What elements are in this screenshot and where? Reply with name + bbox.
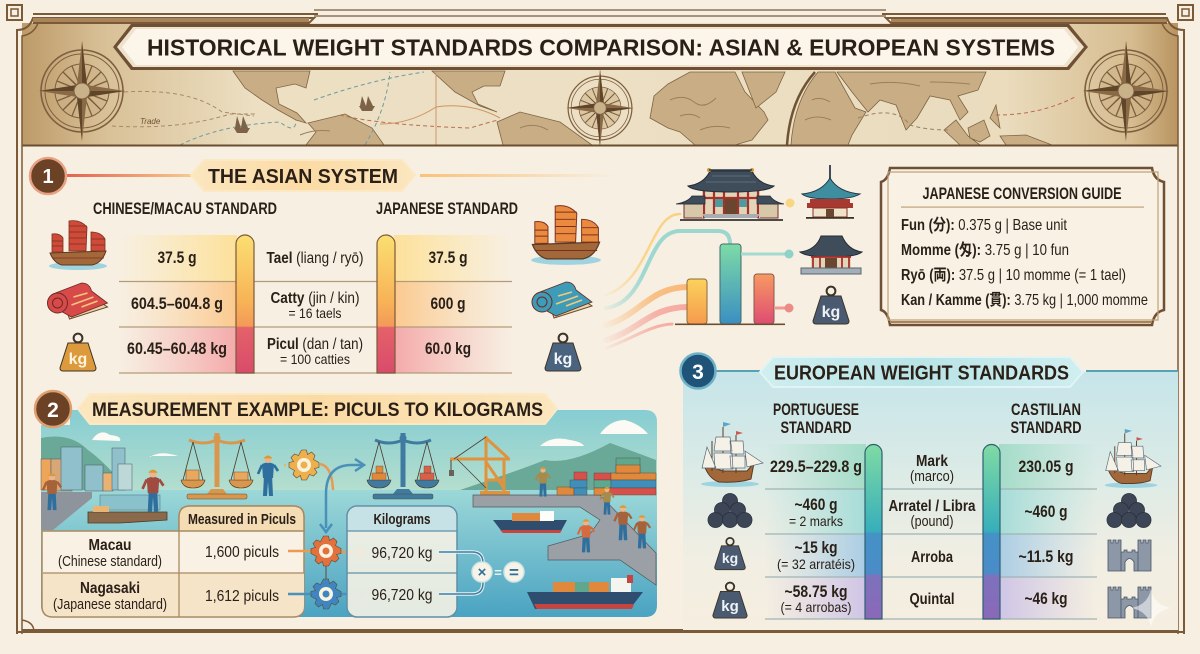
Castilian values: ~460 g xyxy=(1024,502,1068,521)
section 2 badge: 2 xyxy=(47,399,59,422)
icon: red cloth roll xyxy=(48,283,108,319)
Portuguese values: (= 32 arratéis) xyxy=(777,556,855,572)
hills xyxy=(41,436,656,490)
icon: orange junk xyxy=(531,206,601,265)
connectors xyxy=(741,198,794,312)
japanese values: 37.5 g xyxy=(428,248,468,267)
panel: section 2 measurement example xyxy=(35,391,657,617)
icon: slate kg weight xyxy=(545,334,581,371)
icon: gold kg weight: kg xyxy=(69,351,87,368)
unit labels: Catty (jin / kin) xyxy=(270,290,360,307)
crane xyxy=(449,436,510,493)
section 3 heading: EUROPEAN WEIGHT STANDARDS xyxy=(774,362,1069,384)
map land shapes xyxy=(233,71,1052,145)
column headings: CASTILIAN xyxy=(1011,401,1081,419)
gear orange xyxy=(311,536,341,566)
section 3 badge: 3 xyxy=(692,361,704,384)
icon: gold kg weight xyxy=(60,334,96,371)
land relief marks xyxy=(300,82,970,135)
icon: kg weight xyxy=(813,287,849,324)
balance scale blue xyxy=(367,433,439,499)
guide entries: Momme (匁): 3.75 g | 10 fun xyxy=(901,241,1069,259)
quay xyxy=(473,495,656,585)
japanese values: 60.0 kg xyxy=(425,339,471,358)
workers left xyxy=(43,473,61,510)
icon: Castilian galleon xyxy=(1105,429,1161,488)
unit labels: Quintal xyxy=(910,591,954,608)
chinese values xyxy=(127,248,227,358)
guide entries: Kan / Kamme (貫): 3.75 kg | 1,000 momme xyxy=(901,291,1148,309)
kilograms table: 96,720 kg xyxy=(372,587,432,604)
bars xyxy=(687,279,707,324)
map ship xyxy=(234,116,250,133)
Castilian values xyxy=(1018,457,1074,608)
icon: kg weight two: kg xyxy=(721,598,739,615)
Castilian values: ~11.5 kg xyxy=(1018,547,1074,566)
panel: section 3 European standards xyxy=(680,354,1178,630)
gauge Castilian xyxy=(983,444,1000,619)
workers right xyxy=(536,467,650,552)
ship large xyxy=(527,575,643,609)
chinese values: 60.45–60.48 kg xyxy=(127,339,227,358)
equals comparison: = xyxy=(509,563,519,582)
section 3 badge xyxy=(680,354,716,388)
unit labels: (pound) xyxy=(910,514,954,530)
chinese values: 604.5–604.8 g xyxy=(131,294,223,313)
unit labels xyxy=(888,453,976,608)
piculs table xyxy=(42,506,304,617)
baseline xyxy=(675,324,785,325)
Portuguese values xyxy=(770,457,862,615)
compass left xyxy=(39,41,125,141)
process arrows xyxy=(284,459,364,532)
blue scale loads xyxy=(372,466,386,480)
icon: kg weight one xyxy=(715,538,745,570)
section 1 badge xyxy=(30,158,66,194)
Castilian values: 230.05 g xyxy=(1018,457,1074,476)
column headings: JAPANESE STANDARD xyxy=(376,200,518,218)
unit labels: Picul (dan / tan) xyxy=(267,336,363,353)
unit labels: = 100 catties xyxy=(280,351,350,367)
European table xyxy=(765,444,1097,619)
column headings: PORTUGUESE xyxy=(773,401,859,419)
piculs table: Measured in Piculs xyxy=(188,512,296,528)
chart: flow and bars xyxy=(606,198,794,348)
kilograms table: 96,720 kg xyxy=(372,545,432,562)
unit labels: (marco) xyxy=(910,469,954,485)
flow ribbons xyxy=(606,214,730,348)
panel: section 1 the Asian system xyxy=(30,158,615,373)
equals comparison: × xyxy=(478,564,487,581)
title: HISTORICAL WEIGHT STANDARDS COMPARISON: ASIAN & EUROPEAN SYSTEMS xyxy=(147,34,1055,60)
unit labels: = 16 taels xyxy=(288,305,342,321)
map ship two xyxy=(359,96,375,111)
section 1 badge: 1 xyxy=(42,166,54,188)
containers xyxy=(557,458,656,495)
panel: Japanese conversion guide xyxy=(881,168,1164,325)
japanese values xyxy=(425,248,471,358)
column headings: STANDARD xyxy=(780,419,852,437)
icon: red junk xyxy=(49,221,107,270)
section 2 heading: MEASUREMENT EXAMPLE: PICULS TO KILOGRAMS xyxy=(92,399,543,421)
section 1 heading xyxy=(191,160,415,191)
column headings xyxy=(93,200,518,218)
quay left xyxy=(41,492,92,530)
gauge right xyxy=(377,235,395,373)
icon: castle one xyxy=(1108,540,1151,571)
Castilian values: ~46 kg xyxy=(1024,589,1068,608)
equals comparison: = xyxy=(494,565,502,580)
piculs table: Macau xyxy=(88,537,132,554)
watermark sparkle xyxy=(1131,589,1171,627)
dock barge xyxy=(88,512,167,523)
Portuguese values: 229.5–229.8 g xyxy=(770,457,862,476)
unit labels: Arroba xyxy=(911,549,953,566)
gauge left xyxy=(236,235,254,373)
icon: blue cloth roll xyxy=(532,282,592,318)
icon: kg weight: kg xyxy=(822,304,840,321)
compass centre xyxy=(567,69,633,147)
blue scale loads right xyxy=(420,466,434,480)
comparison table xyxy=(119,235,512,373)
harbor scene xyxy=(41,410,657,617)
city xyxy=(41,447,132,491)
section 1 heading: THE ASIAN SYSTEM xyxy=(208,166,398,188)
piculs table: 1,600 piculs xyxy=(205,544,279,561)
unit labels xyxy=(266,250,364,367)
icon: cannonballs left xyxy=(708,493,752,528)
trade routes xyxy=(112,72,1075,145)
tan scale loads xyxy=(186,470,248,480)
map banner xyxy=(22,10,1178,145)
conversion connectors xyxy=(288,546,364,600)
map text: Trade xyxy=(140,117,161,126)
bar two xyxy=(720,244,741,324)
piculs table: Nagasaki xyxy=(80,580,140,597)
icon: kg weight two xyxy=(713,583,747,618)
section 3 rule xyxy=(715,370,1178,372)
worker dock xyxy=(143,470,163,512)
guide entries: Fun (分): 0.375 g | Base unit xyxy=(901,216,1067,234)
piculs table: (Japanese standard) xyxy=(53,597,167,613)
icon: castle two xyxy=(1108,587,1151,618)
balance scale tan xyxy=(181,433,253,499)
column headings: CHINESE/MACAU STANDARD xyxy=(93,200,277,218)
Portuguese values: = 2 marks xyxy=(789,513,843,529)
Portuguese values: ~460 g xyxy=(794,495,838,514)
column headings xyxy=(773,401,1082,437)
icon: small temple xyxy=(800,236,862,274)
chinese values: 37.5 g xyxy=(158,248,196,267)
title banner xyxy=(113,24,1088,70)
column headings: STANDARD xyxy=(1010,419,1082,437)
compass right xyxy=(1083,41,1169,141)
Portuguese values: (= 4 arrobas) xyxy=(780,599,852,615)
equals comparison xyxy=(439,552,524,594)
icon: main temple xyxy=(676,168,784,221)
guide entries xyxy=(901,216,1148,309)
Portuguese values: ~58.75 kg xyxy=(784,582,848,601)
icon: slate kg weight: kg xyxy=(554,351,572,368)
section 1 rule xyxy=(63,174,615,177)
bar three xyxy=(754,274,774,324)
section 2 badge xyxy=(35,391,71,427)
gear yellow xyxy=(289,450,319,480)
map divider line xyxy=(22,144,1178,146)
piculs table: (Chinese standard) xyxy=(58,554,162,570)
section 3 heading xyxy=(760,357,1083,387)
ship small xyxy=(493,511,567,533)
icon: pagoda xyxy=(802,165,860,219)
Portuguese values: ~15 kg xyxy=(794,538,838,557)
guide entries: Ryō (両): 37.5 g | 10 momme (= 1 tael) xyxy=(901,267,1126,284)
clouds xyxy=(92,420,648,457)
icon: kg weight one: kg xyxy=(722,550,738,566)
unit labels: Arratel / Libra xyxy=(888,498,976,515)
unit labels: Tael (liang / ryō) xyxy=(266,250,364,267)
gear blue xyxy=(311,579,341,609)
japanese values: 600 g xyxy=(430,294,466,313)
icon: cannonballs right xyxy=(1107,493,1151,528)
gauge Portuguese xyxy=(865,444,882,619)
icon: Portuguese galleon xyxy=(701,422,763,487)
guide heading: JAPANESE CONVERSION GUIDE xyxy=(922,184,1122,203)
section 2 heading xyxy=(78,394,557,424)
kilograms table xyxy=(347,506,457,617)
kilograms table: Kilograms xyxy=(374,512,430,528)
piculs table: 1,612 piculs xyxy=(205,588,279,605)
worker scale xyxy=(258,456,278,496)
unit labels: Mark xyxy=(916,453,948,470)
